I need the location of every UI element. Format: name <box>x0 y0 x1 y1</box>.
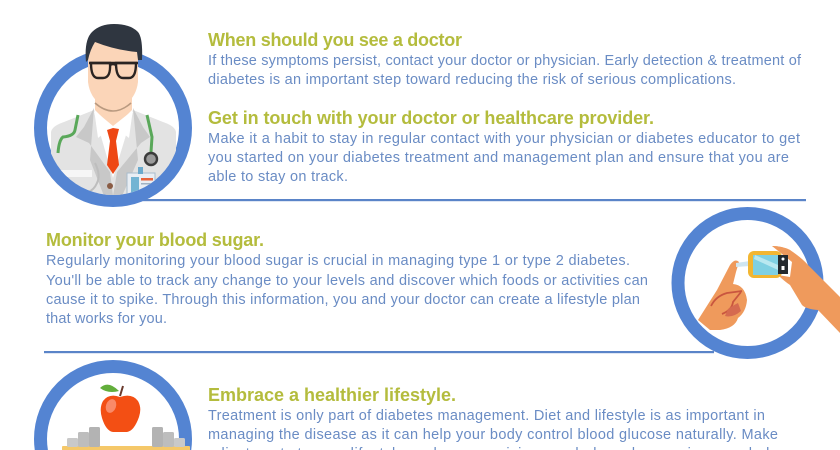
divider: lower <box>44 351 714 353</box>
divider: upper <box>143 199 806 201</box>
text: get in touch: able to stay on track. <box>208 169 348 185</box>
heading: when to see a doctor: When should you see a doctor <box>208 30 462 50</box>
ring: glucose meter <box>678 214 817 352</box>
text: get in touch: you started on your diabetes treatment and management plan and ensure that you are <box>208 150 789 166</box>
hair <box>86 24 142 62</box>
dumbbell left plates <box>67 427 100 447</box>
text: embrace a healthier lifestyle: Treatment is only part of diabetes management. Diet and lifestyle is as important in <box>208 408 765 424</box>
right hand <box>772 246 840 333</box>
dumbbell bar <box>62 446 190 450</box>
id badge <box>127 167 155 197</box>
heading: embrace a healthier lifestyle: Embrace a healthier lifestyle. <box>208 385 456 405</box>
test strip <box>736 261 750 267</box>
meter <box>748 251 782 278</box>
dumbbell right plates <box>152 427 185 447</box>
neck and collar <box>95 95 132 126</box>
text: get in touch <box>208 131 800 185</box>
ring: doctor <box>40 56 186 200</box>
doctor coat <box>51 108 176 197</box>
glasses <box>89 63 138 78</box>
text: monitor blood sugar: cause it to spike. Through this information, you and your doctor can create a lifestyle plan <box>46 292 640 308</box>
text: when to see a doctor: If these symptoms persist, contact your doctor or physician. Early detection & treatment of <box>208 53 802 69</box>
text: when to see a doctor <box>208 53 802 88</box>
text: monitor blood sugar: that works for you. <box>46 311 167 327</box>
icon: apple and dumbbell in blue ring <box>40 366 190 450</box>
apple <box>100 385 140 432</box>
left hand <box>698 261 747 330</box>
stethoscope chest piece <box>145 153 157 165</box>
tie <box>107 128 119 174</box>
icon: doctor in blue ring <box>40 24 186 200</box>
heading: monitor blood sugar: Monitor your blood sugar. <box>46 230 264 250</box>
text: monitor blood sugar: Regularly monitoring your blood sugar is crucial in managing type 1 or type 2 diabetes. <box>46 253 630 269</box>
icon: glucose meter in blue ring <box>678 214 840 352</box>
text: monitor blood sugar <box>46 253 648 327</box>
text: embrace a healthier lifestyle <box>208 408 778 450</box>
text: monitor blood sugar: You'll be able to track any change to your levels and discover which foods or activities can <box>46 273 648 289</box>
heading: get in touch: Get in touch with your doctor or healthcare provider. <box>208 108 654 128</box>
jaw shadow <box>95 103 131 111</box>
finger veins <box>711 291 742 314</box>
text: embrace a healthier lifestyle: managing the disease as it can help your body control blood glucose naturally. Make <box>208 427 778 443</box>
ring: apple <box>40 366 186 450</box>
text: get in touch: Make it a habit to stay in regular contact with your physician or diabetes educator to get <box>208 131 800 147</box>
text: when to see a doctor: diabetes is an important step toward reducing the risk of serious complications. <box>208 72 736 88</box>
fingertip over meter <box>772 246 796 256</box>
face <box>88 40 138 108</box>
